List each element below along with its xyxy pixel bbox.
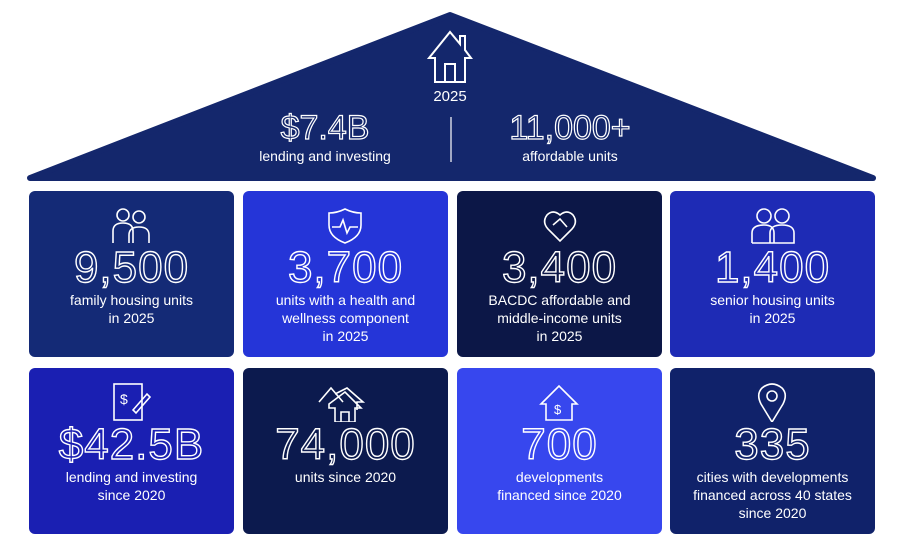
year label: 2025 (433, 88, 467, 105)
icon: house dollar (539, 385, 579, 421)
tile: health: units with a health and (276, 292, 415, 308)
stat: affordable units (511, 114, 630, 164)
tile: senior: in 2025 (750, 310, 795, 326)
tile: family housing: family housing units (70, 292, 193, 308)
roof panel (27, 12, 876, 181)
tile: cities (670, 368, 875, 534)
tile: developments: financed since 2020 (497, 487, 622, 503)
tile: cities: cities with developments (697, 469, 848, 485)
icon: house (427, 30, 473, 83)
icon: document: $ (120, 391, 128, 407)
icon: family (112, 208, 150, 243)
tile: developments: developments (516, 469, 603, 485)
tile: BACDC: middle-income units (497, 310, 622, 326)
tile: lending since 2020: since 2020 (98, 487, 165, 503)
stat: affordable units: affordable units (522, 148, 618, 164)
tile: BACDC: BACDC affordable and (488, 292, 631, 308)
icon: house dollar: $ (554, 402, 562, 417)
tile: senior (670, 191, 875, 357)
tile: cities: financed across 40 states (693, 487, 852, 503)
tile: BACDC (457, 191, 662, 357)
tile: lending since 2020: lending and investing (66, 469, 197, 485)
icon: handshake (544, 211, 576, 242)
tile: health (243, 191, 448, 357)
tile: lending since 2020 (29, 368, 234, 534)
tile: family housing (29, 191, 234, 357)
icon: seniors (751, 208, 795, 244)
tile: developments (457, 368, 662, 534)
tile: BACDC: in 2025 (537, 328, 582, 344)
tile: senior: senior housing units (710, 292, 835, 308)
icon: document (113, 383, 151, 421)
tile: family housing: in 2025 (109, 310, 154, 326)
tile: cities: since 2020 (739, 505, 806, 521)
icon: shield (328, 208, 362, 244)
tile: units since 2020: units since 2020 (295, 469, 396, 485)
icon: houses (318, 386, 365, 422)
tile: health: in 2025 (323, 328, 368, 344)
tile: health: wellness component (282, 310, 409, 326)
stat: lending: lending and investing (259, 148, 391, 164)
stat: lending (259, 112, 391, 164)
tile: units since 2020 (243, 368, 448, 534)
icon: map pin (758, 383, 786, 422)
